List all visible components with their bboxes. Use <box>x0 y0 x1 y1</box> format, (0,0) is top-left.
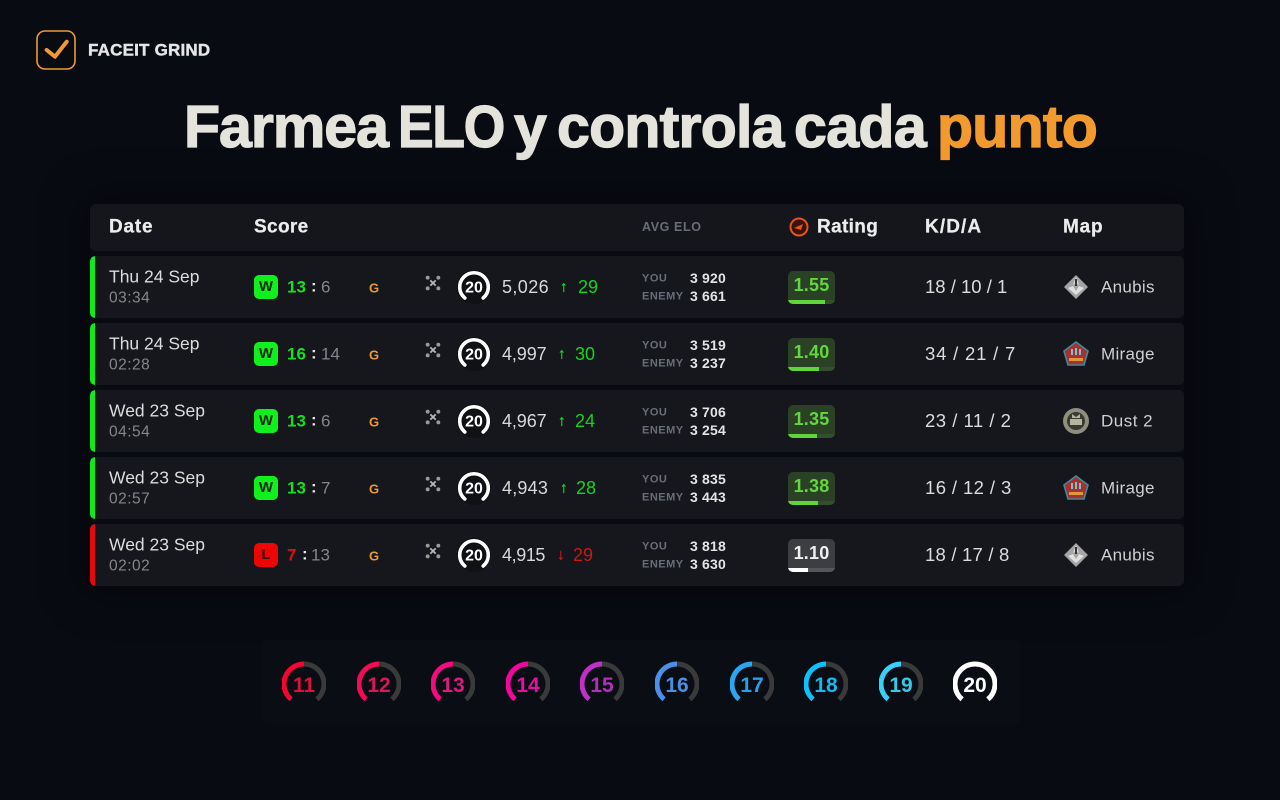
match row 2: 3 519 <box>690 337 726 353</box>
match row 5: 18 / 17 / 8 <box>925 544 1009 565</box>
match row 4: ↑ <box>560 480 568 496</box>
match row 2: ↑ <box>558 346 566 362</box>
match row 2: 30 <box>575 344 595 364</box>
match row 1: 1.55 <box>794 275 829 295</box>
match row 5: 20 <box>465 548 483 564</box>
match row 3 <box>90 390 1184 452</box>
match row 5: ENEMY <box>642 558 684 570</box>
match row 3: W <box>259 412 273 429</box>
match row 3: 1.35 <box>794 409 829 429</box>
match row 4: 7 <box>321 478 330 498</box>
match row 2: 3 237 <box>690 355 726 371</box>
match row 1: 18 / 10 / 1 <box>925 276 1007 297</box>
match row 2: 1.40 <box>794 342 829 362</box>
title: Farmea <box>184 94 388 160</box>
match row 1 <box>90 256 1184 318</box>
title: ELO <box>398 94 504 160</box>
title: cada <box>794 94 926 160</box>
gauge: level 12 <box>357 662 401 702</box>
match row 5: 29 <box>573 545 593 565</box>
match row 5: ↓ <box>557 546 564 564</box>
match row 3: ENEMY <box>642 424 684 436</box>
match row 3: 13 <box>287 412 306 430</box>
match row 1: 13 <box>287 278 306 296</box>
gauge: level 17 <box>730 662 774 702</box>
match row 1: 5,026 <box>502 277 549 297</box>
match row 3: G <box>369 414 379 430</box>
gauge: level 15 <box>580 662 624 702</box>
match row 4: Wed 23 Sep <box>109 467 205 487</box>
match row 1: 6 <box>321 278 330 296</box>
match row 2: G <box>369 348 379 362</box>
brand name: FACEIT GRIND <box>88 40 210 60</box>
header: kda: K/D/A <box>925 216 982 238</box>
match row 1: ENEMY <box>642 290 684 302</box>
level gauges strip <box>262 640 1020 725</box>
match row 3: 24 <box>575 411 595 431</box>
gauge: level 18 <box>804 662 848 702</box>
match row 3: Dust 2 <box>1101 412 1153 430</box>
match row 1: G <box>369 280 379 296</box>
match row 4: 3 835 <box>690 471 726 487</box>
match row 5: 3 630 <box>690 556 726 572</box>
match row 4: 16 / 12 / 3 <box>925 477 1012 498</box>
match row 5: : <box>302 544 308 564</box>
match row 5: Wed 23 Sep <box>109 534 205 554</box>
gauge: level 13 <box>431 662 475 702</box>
match row 3: 04:54 <box>109 423 150 440</box>
match row 5: 3 818 <box>690 538 726 554</box>
match row 2: Mirage <box>1101 344 1155 364</box>
match row 5: 13 <box>311 546 330 564</box>
table header <box>90 204 1184 251</box>
gauge: level 20: 20 <box>963 674 987 697</box>
match row 4: W <box>259 479 273 496</box>
match row 1: Anubis <box>1101 278 1155 296</box>
match row 5: 4,915 <box>502 545 545 565</box>
gauge: level 19: 19 <box>889 674 913 697</box>
match row 2: : <box>311 344 317 362</box>
match row 2: ENEMY <box>642 358 684 370</box>
match row 4: 4,943 <box>502 478 548 498</box>
match row 3: 3 706 <box>690 404 726 420</box>
match row 1: : <box>311 276 317 296</box>
match row 1: 03:34 <box>109 289 150 306</box>
match row 4 <box>90 457 1184 519</box>
match row 3: 23 / 11 / 2 <box>925 410 1011 431</box>
match row 2: 4,997 <box>502 344 547 364</box>
gauge: level 19 <box>879 662 923 702</box>
match row 2: 34 / 21 / 7 <box>925 343 1016 364</box>
title <box>184 94 1097 160</box>
match row 4: 3 443 <box>690 489 726 505</box>
match row 3: 6 <box>321 412 330 430</box>
gauge: level 13: 13 <box>441 674 465 697</box>
match row 4: YOU <box>642 474 667 486</box>
gauge: level 14: 14 <box>516 674 540 697</box>
match row 1: 3 920 <box>690 270 726 286</box>
gauge: level 14 <box>506 662 550 702</box>
match row 1: YOU <box>642 272 667 284</box>
gauge: level 11: 11 <box>293 674 315 697</box>
gauge: level 17: 17 <box>740 674 764 697</box>
match row 4: 13 <box>287 478 306 498</box>
gauge: level 18: 18 <box>814 674 838 697</box>
header: map: Map <box>1063 216 1103 238</box>
match row 2: W <box>259 345 273 362</box>
match row 5: L <box>261 546 271 563</box>
match table <box>90 204 1184 586</box>
header: rating: Rating <box>817 216 878 238</box>
gauge: level 11 <box>282 662 326 702</box>
match row 4: ENEMY <box>642 492 684 504</box>
match row 2: 02:28 <box>109 356 150 373</box>
match row 5: Anubis <box>1101 546 1155 564</box>
title: controla <box>557 94 784 160</box>
match row 4: G <box>369 482 379 496</box>
match row 5: G <box>369 548 379 564</box>
match row 2 <box>90 323 1184 385</box>
match row 2: 20 <box>465 346 483 364</box>
match row 4: : <box>311 478 317 496</box>
match row 3: YOU <box>642 406 667 418</box>
header: avg elo: AVG ELO <box>642 220 702 234</box>
match row 4: 1.38 <box>794 476 829 496</box>
gauge: level 15: 15 <box>590 674 614 697</box>
match row 2: YOU <box>642 340 667 352</box>
match row 5: 02:02 <box>109 557 150 574</box>
header: score: Score <box>254 216 309 238</box>
match row 4: 02:57 <box>109 490 150 507</box>
gauge: level 16: 16 <box>665 674 689 697</box>
match row 4: 20 <box>465 480 483 498</box>
gauge: level 20 <box>953 662 997 702</box>
icon: orange checkbox <box>36 30 76 70</box>
match row 1: 29 <box>578 277 598 297</box>
match row 5: 7 <box>287 546 296 564</box>
match row 3: Wed 23 Sep <box>109 400 205 420</box>
match row 4: Mirage <box>1101 478 1155 498</box>
match row 2: 14 <box>321 344 340 364</box>
match row 2: Thu 24 Sep <box>109 333 199 353</box>
match row 5 <box>90 524 1184 586</box>
match row 3: 4,967 <box>502 411 547 431</box>
match row 1: 3 661 <box>690 288 726 304</box>
logo <box>36 30 210 70</box>
title: y <box>514 94 545 160</box>
match row 3: 3 254 <box>690 422 726 438</box>
match row 3: 20 <box>465 414 483 430</box>
match row 1: Thu 24 Sep <box>109 266 199 286</box>
match row 2: 16 <box>287 344 306 364</box>
match row 3: ↑ <box>558 412 566 430</box>
gauge: level 12: 12 <box>367 674 391 697</box>
title: punto <box>937 94 1097 160</box>
header: date: Date <box>109 216 153 238</box>
gauge: level 16 <box>655 662 699 702</box>
match row 1: 20 <box>465 280 483 296</box>
match row 4: 28 <box>576 478 596 498</box>
match row 1: W <box>259 278 273 295</box>
match row 1: ↑ <box>560 278 568 296</box>
match row 3: : <box>311 410 317 430</box>
match row 5: YOU <box>642 540 667 552</box>
match row 5: 1.10 <box>794 543 829 563</box>
icon: rating logo <box>790 218 808 236</box>
